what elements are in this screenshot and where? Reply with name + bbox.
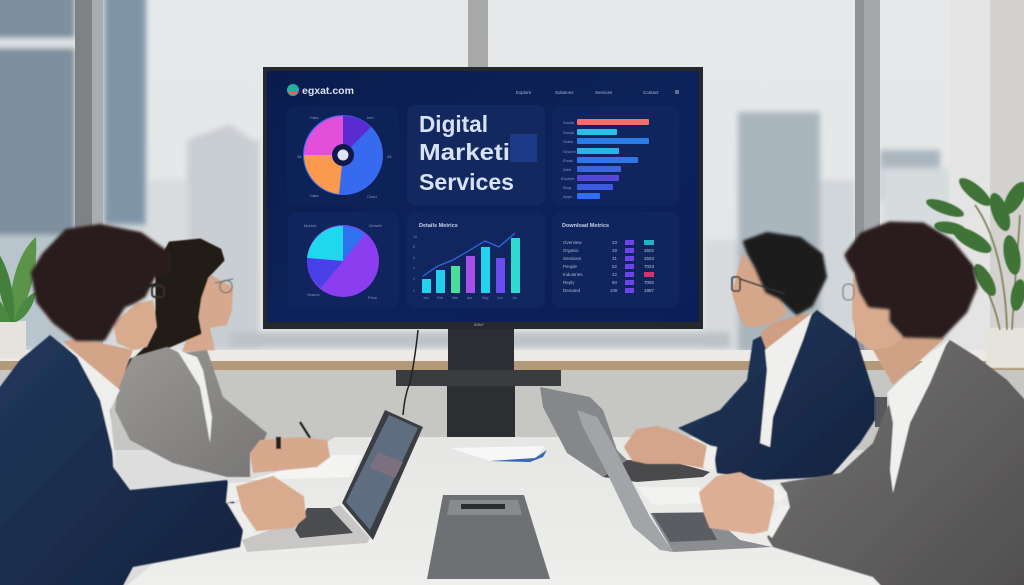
panel: donut chart: All xyxy=(297,154,302,159)
panel: title card xyxy=(407,105,545,205)
panel: title card: Marketi xyxy=(419,139,510,165)
screen navigation: Explore xyxy=(516,90,532,95)
panel: donut chart: Data xyxy=(310,115,319,120)
table xyxy=(122,437,884,585)
panel: data table: 60 xyxy=(612,280,618,285)
panel: data table: Demand xyxy=(563,288,581,293)
panel: donut chart: Data xyxy=(310,193,319,198)
person: man front right gray suit xyxy=(700,224,1024,585)
panel: horizontal bar chart xyxy=(552,106,679,206)
chair back xyxy=(875,397,887,427)
panel: donut chart: Info xyxy=(367,115,374,120)
panel: donut chart: All xyxy=(387,154,392,159)
panel: column chart with trend line: Feb xyxy=(437,296,443,300)
panel: data table: 7092 xyxy=(644,280,655,285)
panel: data table: Reply xyxy=(563,280,575,285)
panel: column chart with trend line: May xyxy=(482,296,489,300)
panel: column chart with trend line xyxy=(407,212,545,308)
panel: column chart with trend line: 6 xyxy=(413,256,415,260)
papers on table xyxy=(250,446,547,480)
panel: horizontal bar chart: Apps xyxy=(563,194,572,199)
panel: pie chart: Growth xyxy=(369,223,382,228)
panel: pie chart: Market xyxy=(304,223,317,228)
window background with city view xyxy=(0,0,1024,360)
panel: horizontal bar chart: Search xyxy=(563,149,576,154)
laptop: front left xyxy=(242,410,423,552)
panel: data table xyxy=(552,212,679,308)
panel: data table: 31 xyxy=(612,256,618,261)
panel: column chart with trend line: Jan xyxy=(423,296,429,300)
laptop: back right xyxy=(540,387,710,482)
panel: horizontal bar chart: Video xyxy=(563,139,574,144)
panel: data table: 2503 xyxy=(644,256,655,261)
panel: data table: Industries xyxy=(563,272,583,277)
person: woman in gray blazer xyxy=(113,240,330,477)
plant right xyxy=(924,174,1024,368)
panel: column chart with trend line: 4 xyxy=(413,266,415,270)
screen navigation xyxy=(516,90,679,95)
panel: pie chart: Price xyxy=(368,295,378,300)
panel: horizontal bar chart: Social xyxy=(563,130,574,135)
panel: column chart with trend line: Details Metrics xyxy=(419,223,458,229)
panel: pie chart xyxy=(288,212,398,308)
panel: data table: People xyxy=(563,264,578,269)
panel: data table: 33 xyxy=(612,240,618,245)
panel: data table: 1887 xyxy=(644,288,655,293)
panel: horizontal bar chart: Email xyxy=(563,158,573,163)
panel: column chart with trend line: Jul xyxy=(512,296,517,300)
screen navigation: Contact xyxy=(643,90,659,95)
panel: title card: Digital xyxy=(419,111,488,137)
panel: title card: Services xyxy=(419,169,514,195)
window frames xyxy=(75,0,1024,352)
cable port in table xyxy=(427,495,550,579)
panel: data table: Sessions xyxy=(563,256,582,261)
monitor stand xyxy=(396,328,561,438)
panel: data table: 29 xyxy=(612,248,618,253)
panel: data table: 2602 xyxy=(644,248,655,253)
screen navigation: Solutions xyxy=(555,90,574,95)
laptop: front right xyxy=(577,410,772,552)
screen navigation: Services xyxy=(595,90,613,95)
panel: column chart with trend line: 8 xyxy=(413,245,415,249)
panel: horizontal bar chart: Explore xyxy=(561,176,575,181)
panel: data table: 7023 xyxy=(644,264,655,269)
panel: donut chart xyxy=(287,106,399,206)
panel: horizontal bar chart: Social xyxy=(563,120,574,125)
panel: horizontal bar chart: Blog xyxy=(563,185,571,190)
panel: column chart with trend line: Jun xyxy=(497,296,503,300)
panel: donut chart: Chart xyxy=(367,194,378,199)
panel: data table: 52 xyxy=(612,264,618,269)
panel: pie chart: Search xyxy=(307,292,320,297)
panel: horizontal bar chart: Web xyxy=(563,167,572,172)
panel: data table: Organic xyxy=(563,248,580,253)
person: man right navy suit xyxy=(625,234,875,480)
person: man front left navy suit xyxy=(0,227,305,585)
panel: data table: Overview xyxy=(563,240,583,245)
screen header logo: egxat.com xyxy=(302,85,354,97)
display monitor xyxy=(263,67,703,329)
wall and window sill xyxy=(0,350,1024,450)
panel: column chart with trend line: 2 xyxy=(413,277,415,281)
panel: data table: Download Metrics xyxy=(562,223,609,229)
panel: data table: 42 xyxy=(612,272,618,277)
panel: column chart with trend line: Mar xyxy=(452,296,459,300)
panel: column chart with trend line: 0 xyxy=(413,289,415,293)
plant left xyxy=(0,237,36,358)
panel: column chart with trend line: 10 xyxy=(413,235,417,239)
panel: column chart with trend line: Apr xyxy=(467,296,473,300)
panel: data table: 108 xyxy=(610,288,618,293)
monitor logo: SONY xyxy=(474,323,485,327)
